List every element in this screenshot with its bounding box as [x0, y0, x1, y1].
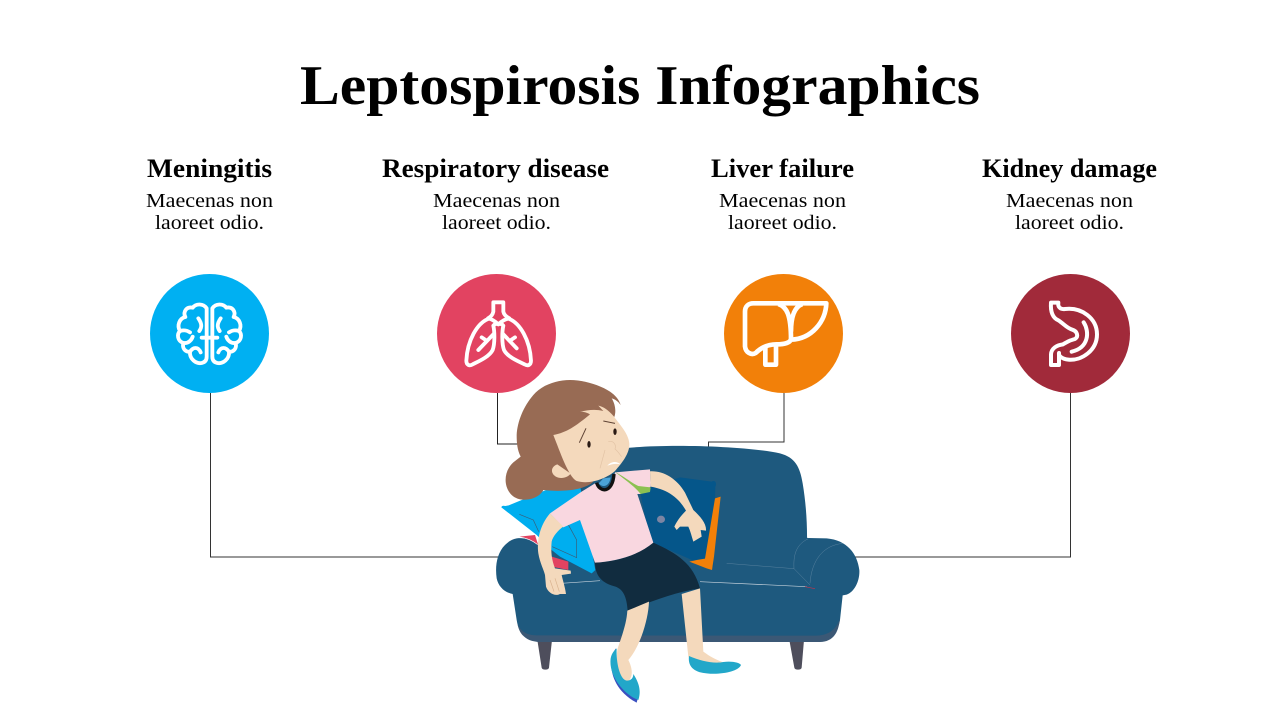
heading: respiratory disease: Respiratory disease — [382, 153, 609, 183]
description: liver failure: Maecenas non — [719, 190, 846, 212]
connector lines — [210, 393, 1070, 557]
pillow: red — [519, 535, 568, 570]
sofa faint seams — [727, 539, 843, 585]
description: kidney damage: laoreet odio. — [1015, 212, 1124, 234]
description: kidney damage: Maecenas non — [1006, 190, 1133, 212]
seam accent — [805, 587, 815, 589]
heading: liver failure: Liver failure — [711, 153, 854, 183]
sofa seams — [562, 581, 807, 587]
pillow: dark blue — [640, 477, 716, 567]
shirt — [550, 469, 653, 563]
heading: meningitis: Meningitis — [147, 153, 272, 183]
facial features — [579, 421, 622, 468]
icon: liver — [724, 274, 843, 393]
panel: meningitis — [146, 153, 273, 393]
heading: kidney damage: Kidney damage — [982, 153, 1157, 183]
icon: lungs — [437, 274, 556, 393]
head — [506, 380, 629, 500]
shoes — [610, 648, 741, 703]
left arm — [538, 513, 571, 595]
arm highlight — [519, 537, 538, 545]
panel: liver failure — [711, 153, 854, 393]
icon: stomach — [1011, 274, 1130, 393]
illustration: woman on sofa — [496, 380, 859, 703]
green strap — [615, 472, 651, 494]
description: meningitis: Maecenas non — [146, 190, 273, 212]
sofa backrest — [580, 446, 807, 577]
face — [553, 406, 629, 482]
panel: respiratory disease — [382, 153, 609, 393]
pillow trim: orange — [689, 497, 721, 570]
description: kidney damage — [1006, 190, 1133, 234]
description: meningitis: laoreet odio. — [155, 212, 264, 234]
hair — [506, 380, 621, 500]
legs — [617, 588, 723, 682]
sofa base trim — [517, 618, 840, 642]
sofa legs — [537, 640, 804, 670]
description: respiratory disease — [433, 190, 560, 234]
title: Leptospirosis Infographics — [300, 55, 980, 117]
pillow button — [657, 516, 665, 523]
skirt — [595, 543, 700, 611]
sofa seat and arms — [496, 537, 859, 638]
collar — [597, 474, 614, 490]
right arm — [650, 471, 706, 542]
description: respiratory disease: laoreet odio. — [442, 212, 551, 234]
description: liver failure: laoreet odio. — [728, 212, 837, 234]
description: respiratory disease: Maecenas non — [433, 190, 560, 212]
description: liver failure — [719, 190, 846, 234]
description: meningitis — [146, 190, 273, 234]
pillow creases — [519, 514, 577, 558]
pillow: light blue — [501, 485, 595, 573]
icon: brain — [150, 274, 269, 393]
panel: kidney damage — [982, 153, 1157, 393]
ear — [552, 464, 571, 478]
left hand finger lines — [550, 578, 559, 592]
